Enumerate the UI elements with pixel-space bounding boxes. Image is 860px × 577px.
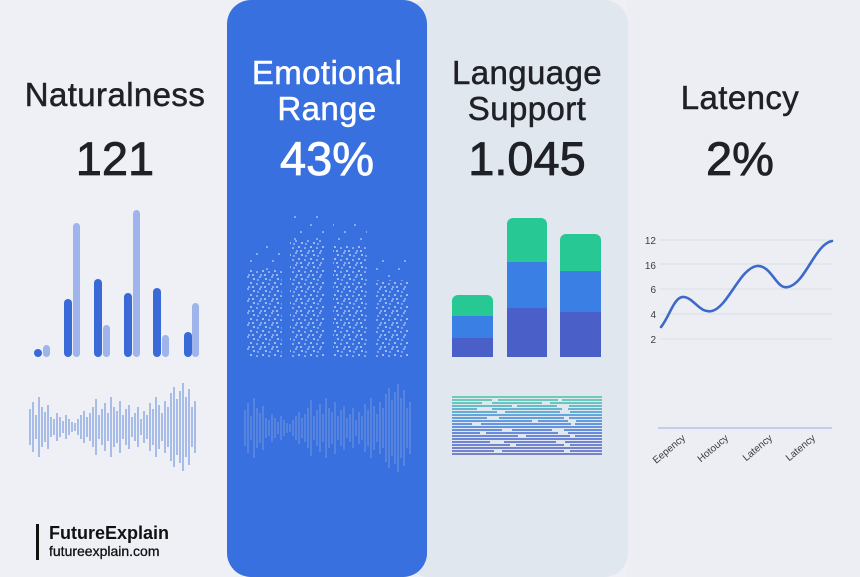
number: 1.045: 1.045 [468,132,586,185]
logo: FutureExplain: FutureExplain [49,523,169,543]
line chart: latency: Latency [741,433,775,464]
stacked bar chart: language support [452,218,601,357]
heading: emotional range [252,54,402,128]
heading: latency: Latency [681,79,799,116]
logo: FutureExplain [36,524,169,560]
heading: language support: Language [452,54,602,91]
number: 121: 121 [76,132,154,185]
line chart: latency: Hotoucy [696,433,731,465]
line chart: latency: 12 [645,236,656,247]
line chart: latency: 6 [650,285,656,296]
heading: naturalness: Naturalness [25,76,205,113]
panel: latency background [627,0,860,577]
line chart: latency: 4 [650,310,656,321]
bar chart: naturalness [34,210,199,357]
number: 43%: 43% [280,132,374,185]
striped block: language support [452,397,602,454]
heading: language support [452,54,602,128]
line chart: latency: Eepency [651,433,688,466]
waveform: naturalness [30,383,195,471]
heading: emotional range: Range [277,90,377,127]
panel: language support [404,0,628,577]
number: 2%: 2% [706,132,774,185]
heading: language support: Support [468,90,586,127]
line chart: latency: 2 [650,335,656,346]
heading: emotional range: Emotional [252,54,402,91]
scatter chart: emotional range [247,212,408,357]
line chart: latency: Latency [784,433,818,464]
line chart: latency: 16 [645,261,656,272]
panel: emotional range [227,0,427,577]
logo: FutureExplain: futureexplain.com [49,543,160,559]
line chart: latency [645,236,832,466]
waveform: emotional range [245,384,410,472]
